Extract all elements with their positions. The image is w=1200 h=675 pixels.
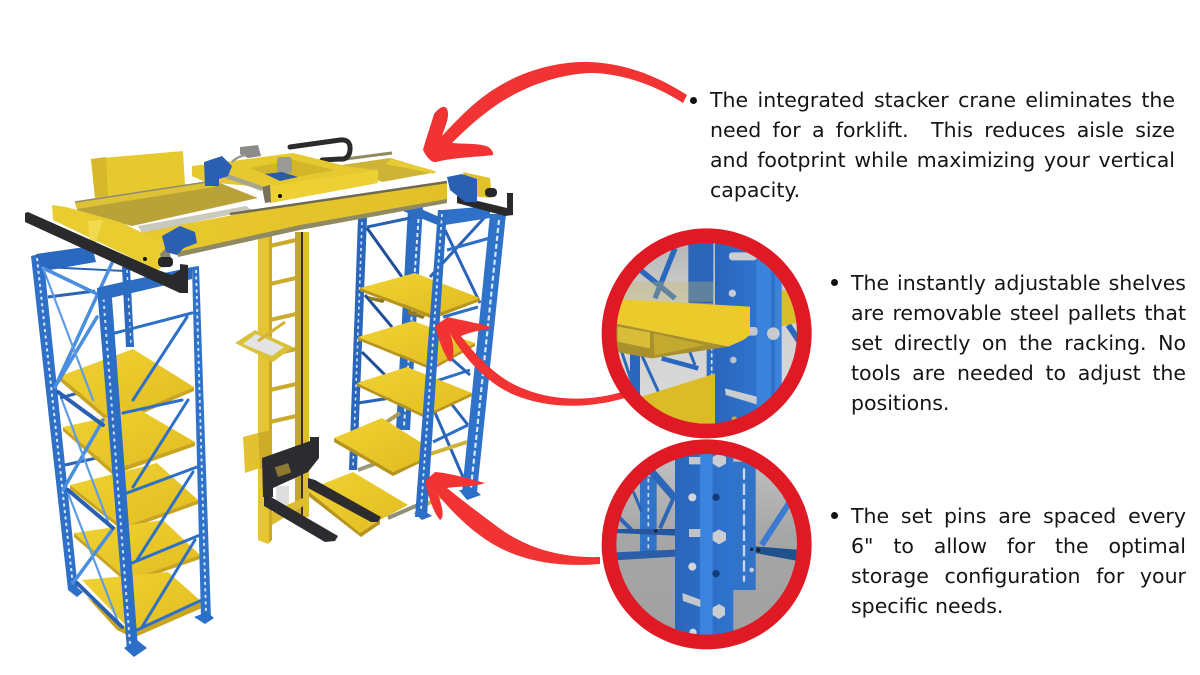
bullet text: set pins: 6" to allow for the optimal (851, 534, 1186, 558)
arrow: to set pins (425, 472, 600, 565)
mast left rail (258, 236, 272, 544)
bullet text: adjustable shelves: tools are needed to adjust the (851, 361, 1186, 385)
bullet text: stacker crane (690, 88, 1175, 202)
right storage rack (307, 205, 506, 537)
mast right rail (276, 232, 309, 517)
far side beam (338, 153, 437, 182)
left end truck (52, 205, 173, 270)
mast platform (235, 322, 293, 362)
black lifting forks (262, 437, 381, 542)
right rack far post (398, 205, 506, 500)
right rack support rods (358, 413, 467, 518)
gray gearbox (232, 145, 261, 162)
right rack shelf 3 (357, 367, 472, 418)
left storage rack (31, 246, 214, 657)
overhead crane (25, 140, 513, 293)
arrow: to shelves (435, 317, 625, 406)
front crane beam (138, 182, 447, 257)
shelf detail photo (616, 243, 797, 424)
set pin detail photo (616, 454, 797, 635)
rack shelf 1 (60, 349, 194, 426)
bullet text: adjustable shelves: The instantly adjustable shelves (851, 271, 1186, 295)
right rack front post (414, 210, 447, 520)
right rack rear post and braces (349, 205, 490, 477)
right black rail (457, 193, 513, 216)
rack rear braces (44, 267, 125, 465)
right rack shelf 1 (360, 273, 480, 319)
bullet text: adjustable shelves: positions. (851, 391, 949, 415)
red ring (609, 236, 804, 431)
rack side braces (43, 263, 202, 630)
bullet text: stacker crane: need for a forklift. This reduces aisle size (710, 118, 1175, 142)
trolley motor cylinder (265, 157, 298, 181)
rack rear posts (31, 246, 134, 590)
rack shelf 4 (74, 520, 200, 584)
bullet text: set pins: storage configuration for your (851, 564, 1186, 588)
red ring (609, 447, 804, 642)
zoom circle: removable shelf detail (608, 235, 808, 435)
bullet text: set pins: The set pins are spaced every (851, 504, 1186, 528)
arrow: to crane (423, 62, 687, 162)
right rack shelf 5 (307, 472, 408, 537)
right drive motor (447, 174, 477, 202)
bullet text: adjustable shelves: are removable steel pallets that (851, 301, 1186, 325)
rack shelf 2 (63, 410, 195, 475)
bullet text: adjustable shelves (831, 271, 1186, 415)
rack shelf 5 (82, 572, 202, 638)
right rack shelf 2 (358, 321, 475, 370)
mast yellow side plate (243, 430, 272, 473)
rear crane beam (75, 181, 258, 226)
mast lower yellow strut (272, 497, 305, 525)
mast rungs (270, 240, 296, 422)
black cable carrier (290, 140, 350, 160)
left drive motor (162, 226, 197, 255)
bullet text: set pins: specific needs. (851, 594, 1003, 618)
rack shelf 3 (70, 463, 198, 531)
bullet text: stacker crane: and footprint while maximizing your vertical (710, 148, 1175, 172)
bullet text: set pins (831, 504, 1186, 618)
trolley blue motor (204, 156, 232, 186)
crane trolley (192, 153, 378, 203)
zoom circle: set pin detail (608, 445, 808, 645)
left black rail (25, 212, 188, 293)
lifting mast (235, 232, 309, 544)
electrical cabinet (91, 151, 185, 198)
right rack shelf 4 (334, 418, 425, 476)
bullet text: adjustable shelves: set directly on the racking. No (851, 331, 1186, 355)
rack front posts and feet (68, 266, 214, 657)
right end truck (463, 172, 497, 198)
bullet text: stacker crane: capacity. (710, 178, 800, 202)
bullet text: stacker crane: The integrated stacker crane eliminates the (710, 88, 1175, 112)
